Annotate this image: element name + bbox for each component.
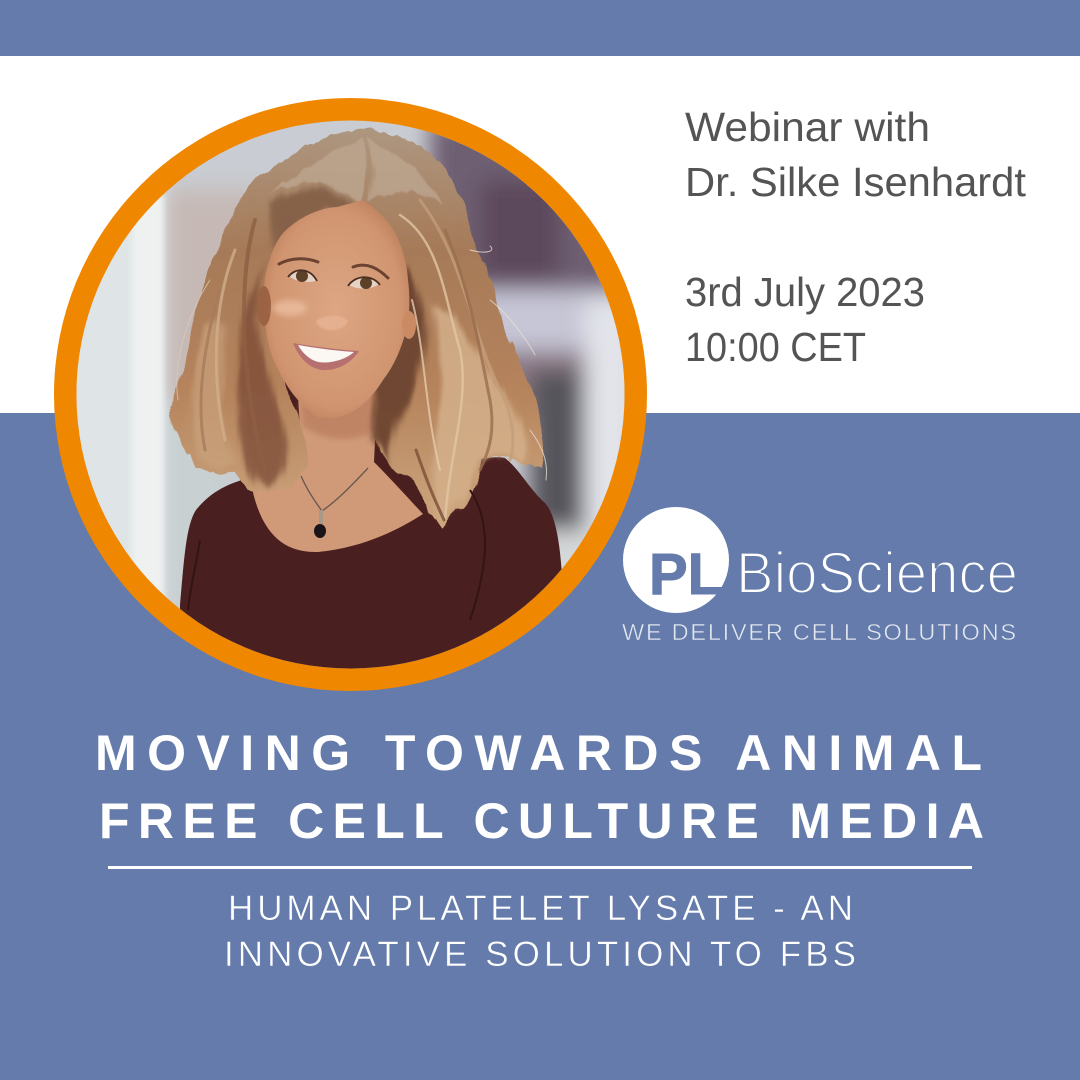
left eye [288,270,317,282]
subheading line 1: HUMAN PLATELET LYSATE - AN [228,889,853,928]
hair strands [177,200,547,520]
date: 3rd July 2023 [685,269,925,315]
face [264,200,409,418]
portrait photo [60,110,635,690]
background: top band [0,0,1080,56]
right ear [402,311,416,339]
teeth [298,345,354,363]
shirt [180,457,562,690]
hair behind the neck [284,382,392,468]
neck shadow [297,392,376,440]
webinar line: Webinar with [685,104,930,150]
dark hair right [372,265,424,465]
logo PL letters: PL [649,542,723,607]
window pillar [132,195,164,615]
right eyebrow [353,265,388,278]
heading line 1: MOVING TOWARDS ANIMAL [95,725,982,781]
logo wordmark: BioScience [736,541,1018,606]
shirt sleeve seam [188,490,485,620]
blond hair left [191,319,232,466]
left eyebrow [279,259,318,264]
blond hair right [430,300,525,522]
left ear shadow [257,286,271,326]
skin of neck and chest [252,380,423,552]
divider line [108,866,972,869]
right eye [348,277,380,289]
main heading [95,725,984,849]
logo tagline: WE DELIVER CELL SOLUTIONS [622,619,1016,645]
dark hair underside [236,262,283,488]
pendant [314,510,326,538]
subheading [224,889,856,974]
portrait ring [54,98,647,691]
speaker details text [685,104,1027,370]
background: lower blue panel [0,413,1080,1080]
speaker name: Dr. Silke Isenhardt [685,159,1027,205]
necklace [301,468,368,511]
time: 10:00 CET [685,324,866,370]
nose [316,316,348,330]
hair parting highlight [270,140,440,205]
cheek highlight [273,300,307,316]
background: white panel [0,56,1080,413]
hair [173,131,545,527]
hair parting dark wave [268,184,354,248]
logo circle [623,507,729,613]
lips [293,343,359,370]
heading line 2: FREE CELL CULTURE MEDIA [99,793,984,849]
logo: PL BioScience [622,507,1018,645]
subheading line 2: INNOVATIVE SOLUTION TO FBS [224,935,856,974]
